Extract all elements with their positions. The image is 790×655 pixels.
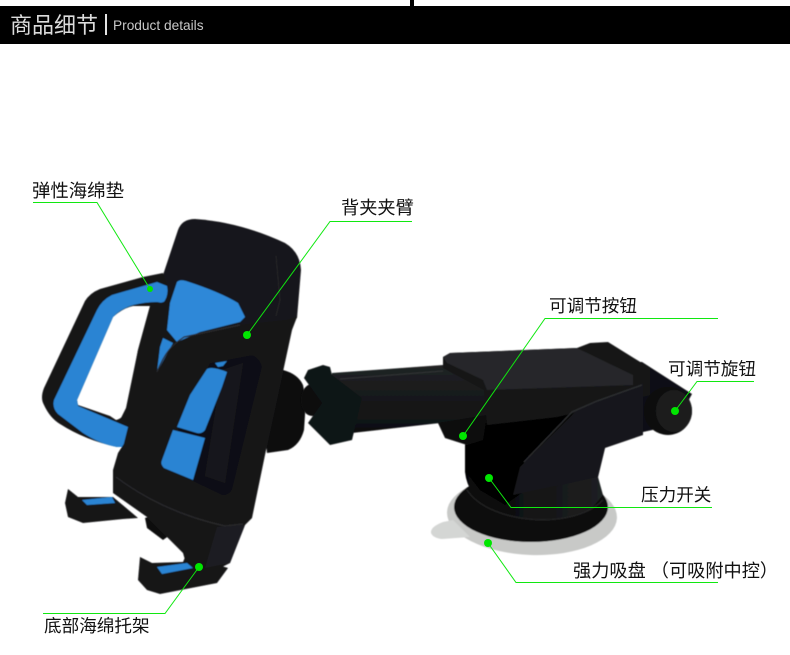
callout: 可调节按钮: 可调节按钮 — [549, 296, 637, 316]
inner arm strip — [120, 300, 195, 425]
suction pull tab — [431, 520, 470, 539]
callout: 可调节旋钮: 可调节旋钮 — [668, 359, 756, 379]
adjustment knob housing — [620, 362, 692, 432]
arm collar — [304, 365, 362, 445]
body edge highlight — [116, 477, 243, 526]
suction cup disc — [446, 472, 618, 558]
back plate — [163, 219, 301, 345]
callout: 强力吸盘 — [484, 539, 778, 582]
head housing — [443, 342, 650, 425]
inner recess — [163, 355, 262, 495]
back sponge pad — [167, 280, 245, 342]
dark opening — [465, 400, 610, 505]
callout: 底部海绵托架: 底部海绵托架 — [44, 616, 150, 636]
product: extension arm and suction base — [301, 342, 692, 558]
front sponge pads — [177, 368, 227, 433]
callout: 压力开关 — [485, 474, 712, 508]
header bar: Product details — [113, 18, 204, 33]
telescopic arm — [330, 360, 490, 433]
header bar — [0, 0, 790, 44]
callout: 可调节旋钮 — [668, 359, 756, 415]
left arm — [42, 273, 172, 447]
adjustment knob — [644, 387, 692, 435]
callout: 弹性海绵垫: 弹性海绵垫 — [32, 180, 124, 201]
callout: 强力吸盘: 强力吸盘 （可吸附中控） — [573, 561, 778, 581]
left foot — [65, 489, 138, 523]
header bar: 商品细节 — [10, 13, 98, 38]
connector — [145, 515, 170, 540]
product: phone holder cradle — [42, 219, 306, 594]
front clamp body — [113, 317, 297, 568]
adjustment button — [438, 415, 487, 445]
bottom foot — [138, 555, 228, 594]
diagonal support — [513, 383, 643, 495]
small blue sliver — [215, 361, 227, 367]
left arm sponge pad — [54, 282, 168, 447]
ball joint — [301, 384, 323, 416]
callout: 底部海绵托架 — [43, 563, 203, 636]
callout: 背夹夹臂: 背夹夹臂 — [341, 198, 414, 218]
pivot joint — [262, 370, 306, 453]
callout: 可调节按钮 — [459, 296, 718, 440]
base dome — [465, 445, 605, 520]
callout: 弹性海绵垫 — [32, 180, 153, 292]
callout: 背夹夹臂 — [243, 198, 414, 339]
callout: 压力开关: 压力开关 — [641, 485, 711, 505]
